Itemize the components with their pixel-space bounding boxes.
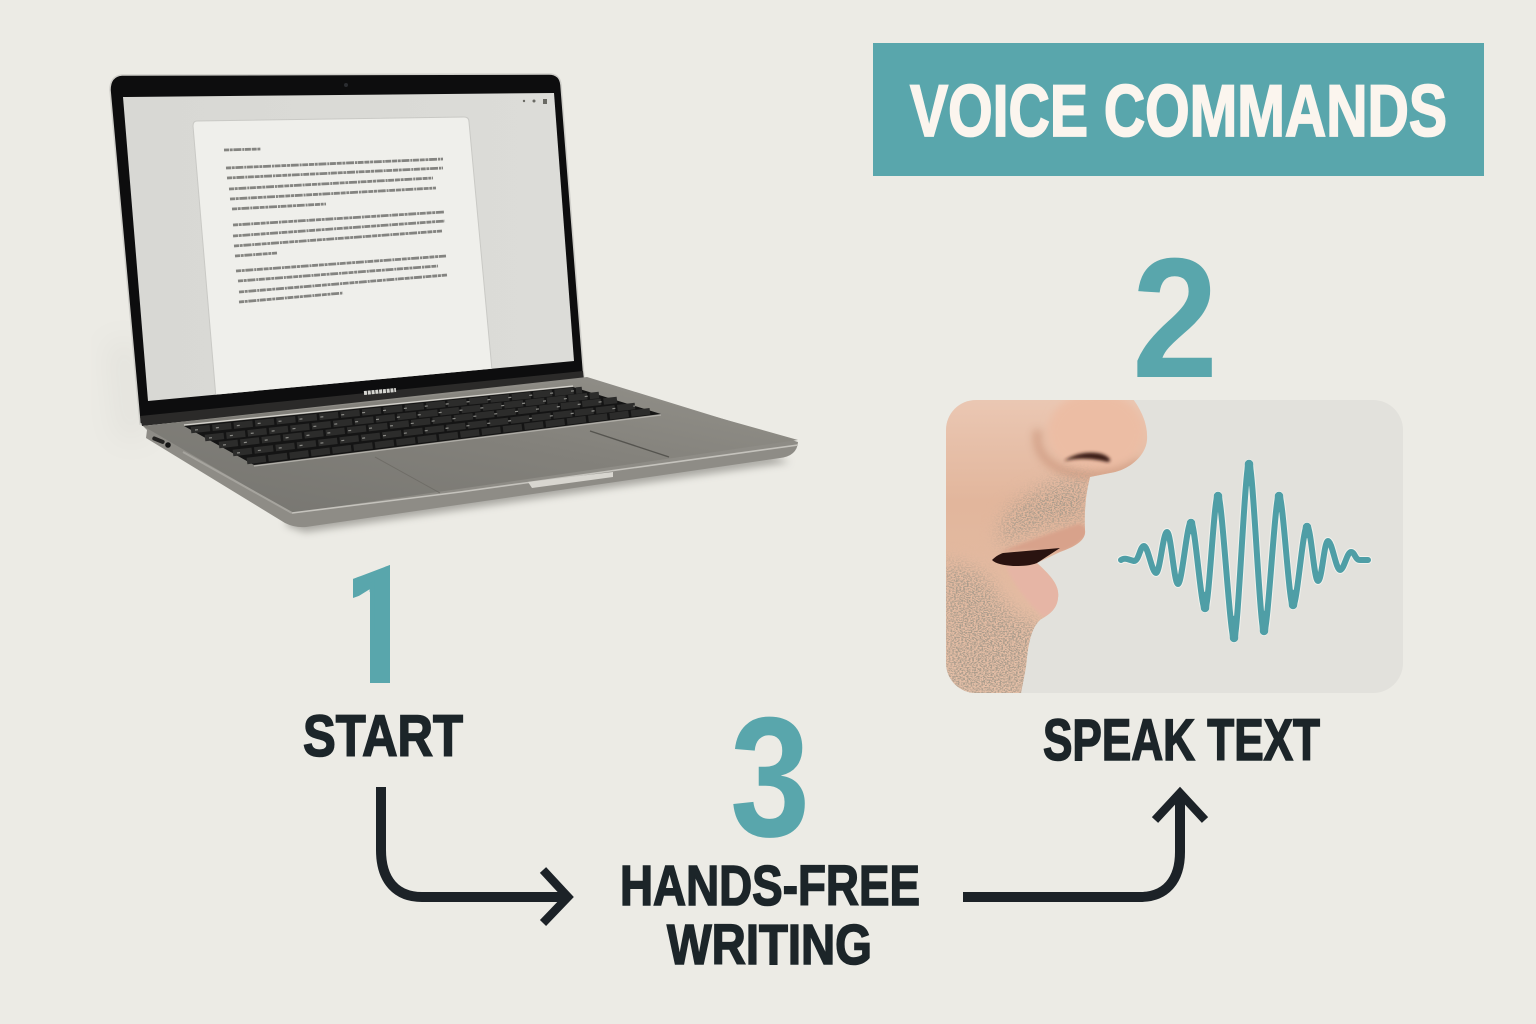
waveform halo: [1121, 463, 1368, 639]
step 1 label: START: [303, 704, 463, 769]
step number 3: 3: [730, 682, 810, 873]
arrow: start to hands-free: [381, 787, 568, 923]
step 3 label: HANDS-FREE: [620, 854, 920, 918]
keyboard: [184, 386, 661, 466]
sound waveform: [1121, 463, 1368, 639]
step number 2: 2: [1132, 223, 1218, 414]
laptop base outer edge: [143, 377, 798, 527]
step 2 label: SPEAK TEXT: [1043, 708, 1320, 773]
front notch: [528, 472, 613, 488]
brand label: [364, 390, 396, 393]
waveform line: [1121, 463, 1368, 639]
laptop lid: [110, 74, 584, 424]
front rim highlight: [292, 445, 798, 513]
side ports: [152, 436, 171, 448]
laptop base deck: [143, 380, 798, 513]
lower lip: [1047, 581, 1058, 616]
laptop illustration: [105, 74, 798, 532]
face profile: [940, 392, 1150, 700]
document text lines: [224, 149, 447, 302]
step number 1: 1: [332, 528, 428, 720]
step 3 label: [620, 854, 920, 977]
nostril: [1064, 453, 1110, 462]
left bevel highlight: [183, 452, 292, 513]
stubble: [942, 476, 1090, 700]
webcam: [344, 83, 348, 87]
arrow: hands-free to speak text: [963, 792, 1205, 897]
voice photo card: [940, 392, 1403, 700]
nose: [1037, 392, 1144, 475]
title banner: [873, 43, 1484, 176]
laptop screen: [123, 93, 574, 401]
window controls: [523, 99, 547, 104]
waveform thick tips: [1191, 464, 1307, 638]
laptop shadow: [105, 340, 790, 532]
step 3 label: WRITING: [667, 913, 872, 977]
mouth opening: [992, 548, 1060, 566]
trackpad: [375, 431, 669, 493]
upper lip: [1000, 524, 1087, 552]
laptop hinge strip: [140, 371, 584, 426]
document page: [193, 117, 492, 398]
